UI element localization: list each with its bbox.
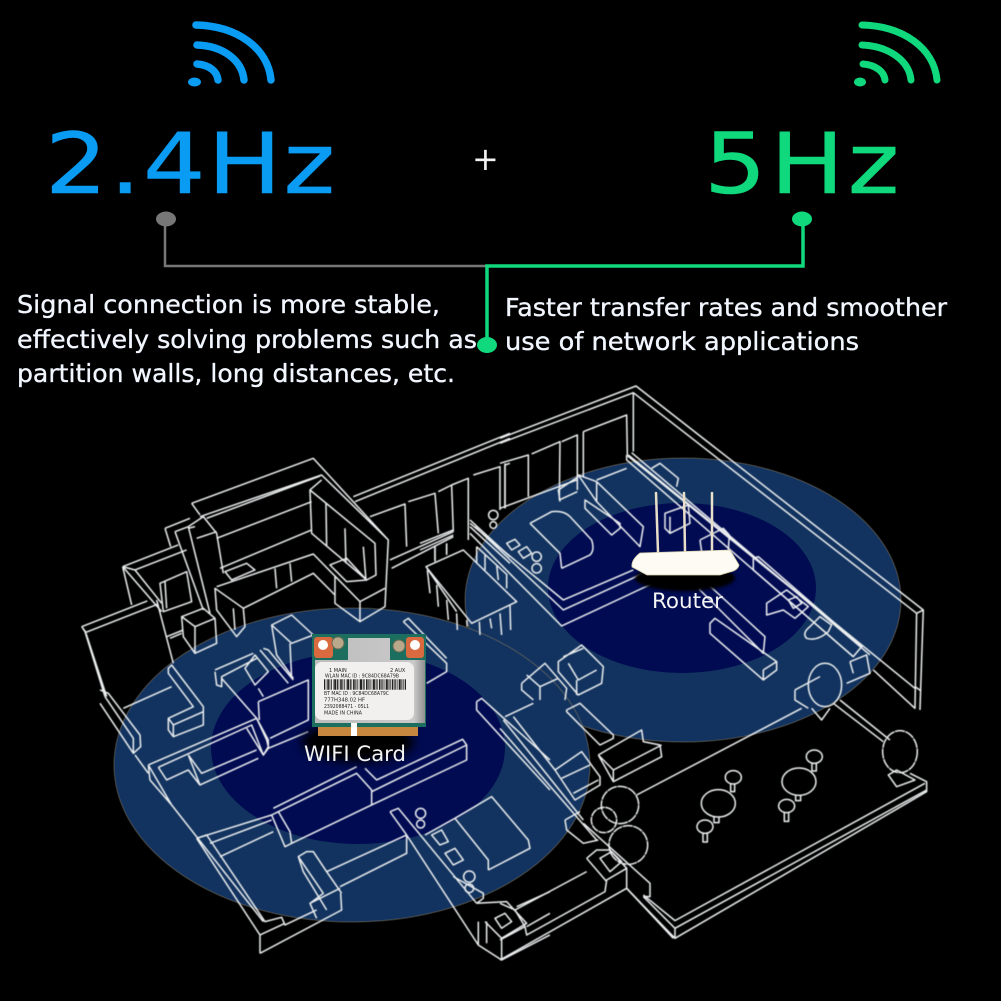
card label text: 777H348.02 HF bbox=[324, 698, 365, 704]
label: Router: Router bbox=[652, 589, 723, 614]
wireframe: dining table and armchairs bbox=[420, 523, 660, 700]
coverage: signal ellipses bbox=[114, 458, 901, 922]
text block: 2.4Hz description: effectively solving problems such as bbox=[17, 325, 477, 354]
wifi card shadow bbox=[302, 722, 414, 762]
label: WIFI Card: WIFI Card bbox=[304, 742, 406, 766]
card label text: WLAN MAC ID : 9C84DC68A79B bbox=[325, 674, 400, 680]
heading: 2.4Hz: 2.4Hz bbox=[45, 115, 335, 213]
card label text: MADE IN CHINA bbox=[324, 710, 363, 716]
card barcode bbox=[324, 679, 406, 690]
floor plan wireframe bbox=[82, 386, 927, 960]
wireframe: left living room bbox=[100, 600, 313, 755]
card gold fingers bbox=[318, 725, 418, 736]
text block: 2.4Hz description bbox=[17, 290, 477, 388]
card metal shield bbox=[315, 638, 425, 723]
wireframe: router room bbox=[500, 386, 923, 720]
text block: 5Hz description: Faster transfer rates and smoother bbox=[505, 293, 948, 322]
card board bbox=[312, 634, 426, 727]
connector: gray line from 2.4Hz bbox=[156, 212, 486, 266]
connector: green line from 5Hz bbox=[477, 212, 812, 353]
router body bbox=[632, 550, 739, 575]
card label text: 2 AUX bbox=[390, 668, 406, 674]
card notch bbox=[351, 722, 357, 736]
heading: plus sign: + bbox=[472, 140, 499, 178]
card label text: 2392088471 - 05L1 bbox=[324, 704, 369, 710]
wifi card bbox=[312, 634, 426, 736]
card label text bbox=[324, 668, 406, 716]
wireframe: lower left rooms bbox=[135, 698, 550, 960]
card label text: 1 MAIN bbox=[329, 668, 347, 674]
icon: blue wifi signal bbox=[188, 25, 271, 86]
heading: 5Hz: 5Hz bbox=[704, 115, 899, 213]
icon: green wifi signal bbox=[854, 25, 937, 86]
wireframe: garden terrace bbox=[500, 700, 927, 960]
card antenna connectors bbox=[332, 637, 405, 652]
router antennas bbox=[656, 493, 712, 552]
router bbox=[632, 493, 739, 591]
card label text: BT MAC ID : 9C84DC68A79C bbox=[324, 691, 389, 697]
router shadow bbox=[635, 565, 735, 591]
wireframe: upper left rooms bbox=[82, 433, 510, 697]
card mounting pads bbox=[314, 637, 424, 658]
text block: 2.4Hz description: partition walls, long distances, etc. bbox=[17, 359, 455, 388]
card label bbox=[315, 662, 414, 720]
text block: 2.4Hz description: Signal connection is more stable, bbox=[17, 290, 440, 319]
text block: 5Hz description: use of network applications bbox=[505, 327, 859, 356]
text block: 5Hz description bbox=[505, 293, 948, 356]
